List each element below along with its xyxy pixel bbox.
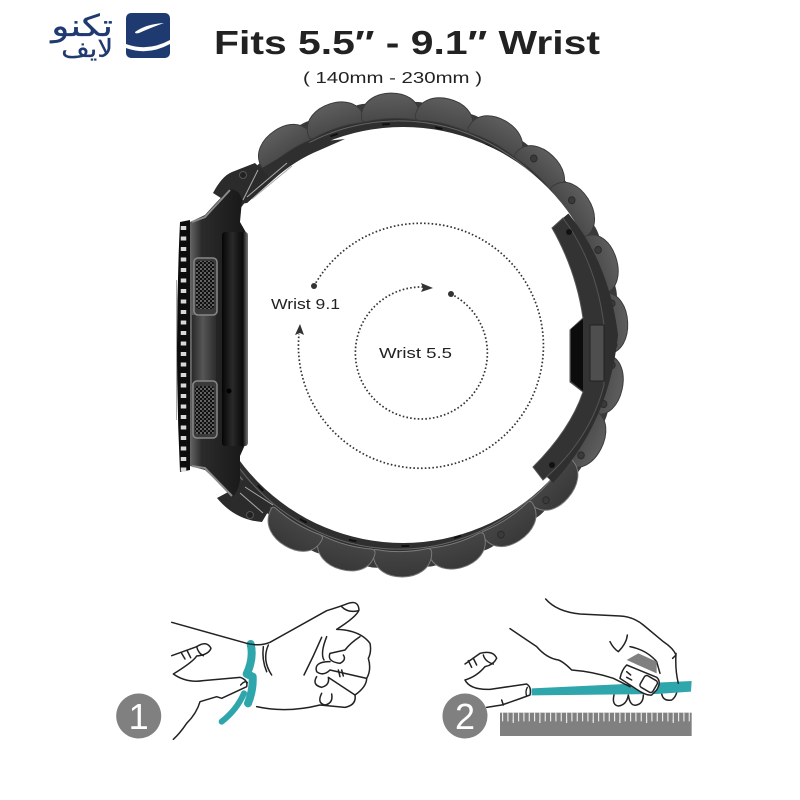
step 2 badge: 2 (455, 696, 475, 737)
holding hand outline (465, 652, 530, 707)
step 2 illustration (465, 599, 692, 736)
logo wordmark: لايف (61, 35, 113, 64)
band inner opening (198, 127, 608, 543)
bezel (176, 220, 190, 472)
watch band (198, 92, 629, 578)
step 1 badge (116, 694, 161, 738)
logo icon (126, 13, 170, 58)
lug ridges (240, 163, 292, 513)
label: wrist 9.1: Wrist 9.1 (271, 297, 340, 313)
clasp (533, 218, 611, 480)
step 2 badge (442, 694, 488, 738)
logo wordmark: تكنو (49, 9, 113, 44)
pinching hand outline (510, 599, 678, 695)
label: wrist 5.5: Wrist 5.5 (379, 346, 452, 362)
lower lug link (217, 478, 272, 522)
measuring hand outline (172, 644, 247, 739)
upper lug link (213, 163, 272, 205)
bottom button (193, 381, 217, 438)
step 1 illustration (172, 602, 371, 739)
teal measuring strip, wrist (222, 644, 253, 722)
brushed centre panel (192, 315, 216, 383)
top button (194, 258, 217, 315)
inner dotted arc (355, 283, 487, 419)
lower fingers behind strip (613, 683, 678, 706)
logo wordmark (49, 9, 113, 64)
upper track thickening (240, 139, 345, 203)
title: Fits 5.5″ - 9.1″ Wrist (214, 24, 600, 61)
measured hand outline (172, 602, 371, 710)
subtitle: ( 140mm - 230mm ) (303, 70, 482, 87)
watch case (176, 189, 248, 497)
outer dotted arc (295, 223, 543, 468)
ruler (500, 713, 692, 736)
step 1 badge: 1 (129, 696, 149, 737)
teal measuring strip, flat (532, 681, 692, 695)
